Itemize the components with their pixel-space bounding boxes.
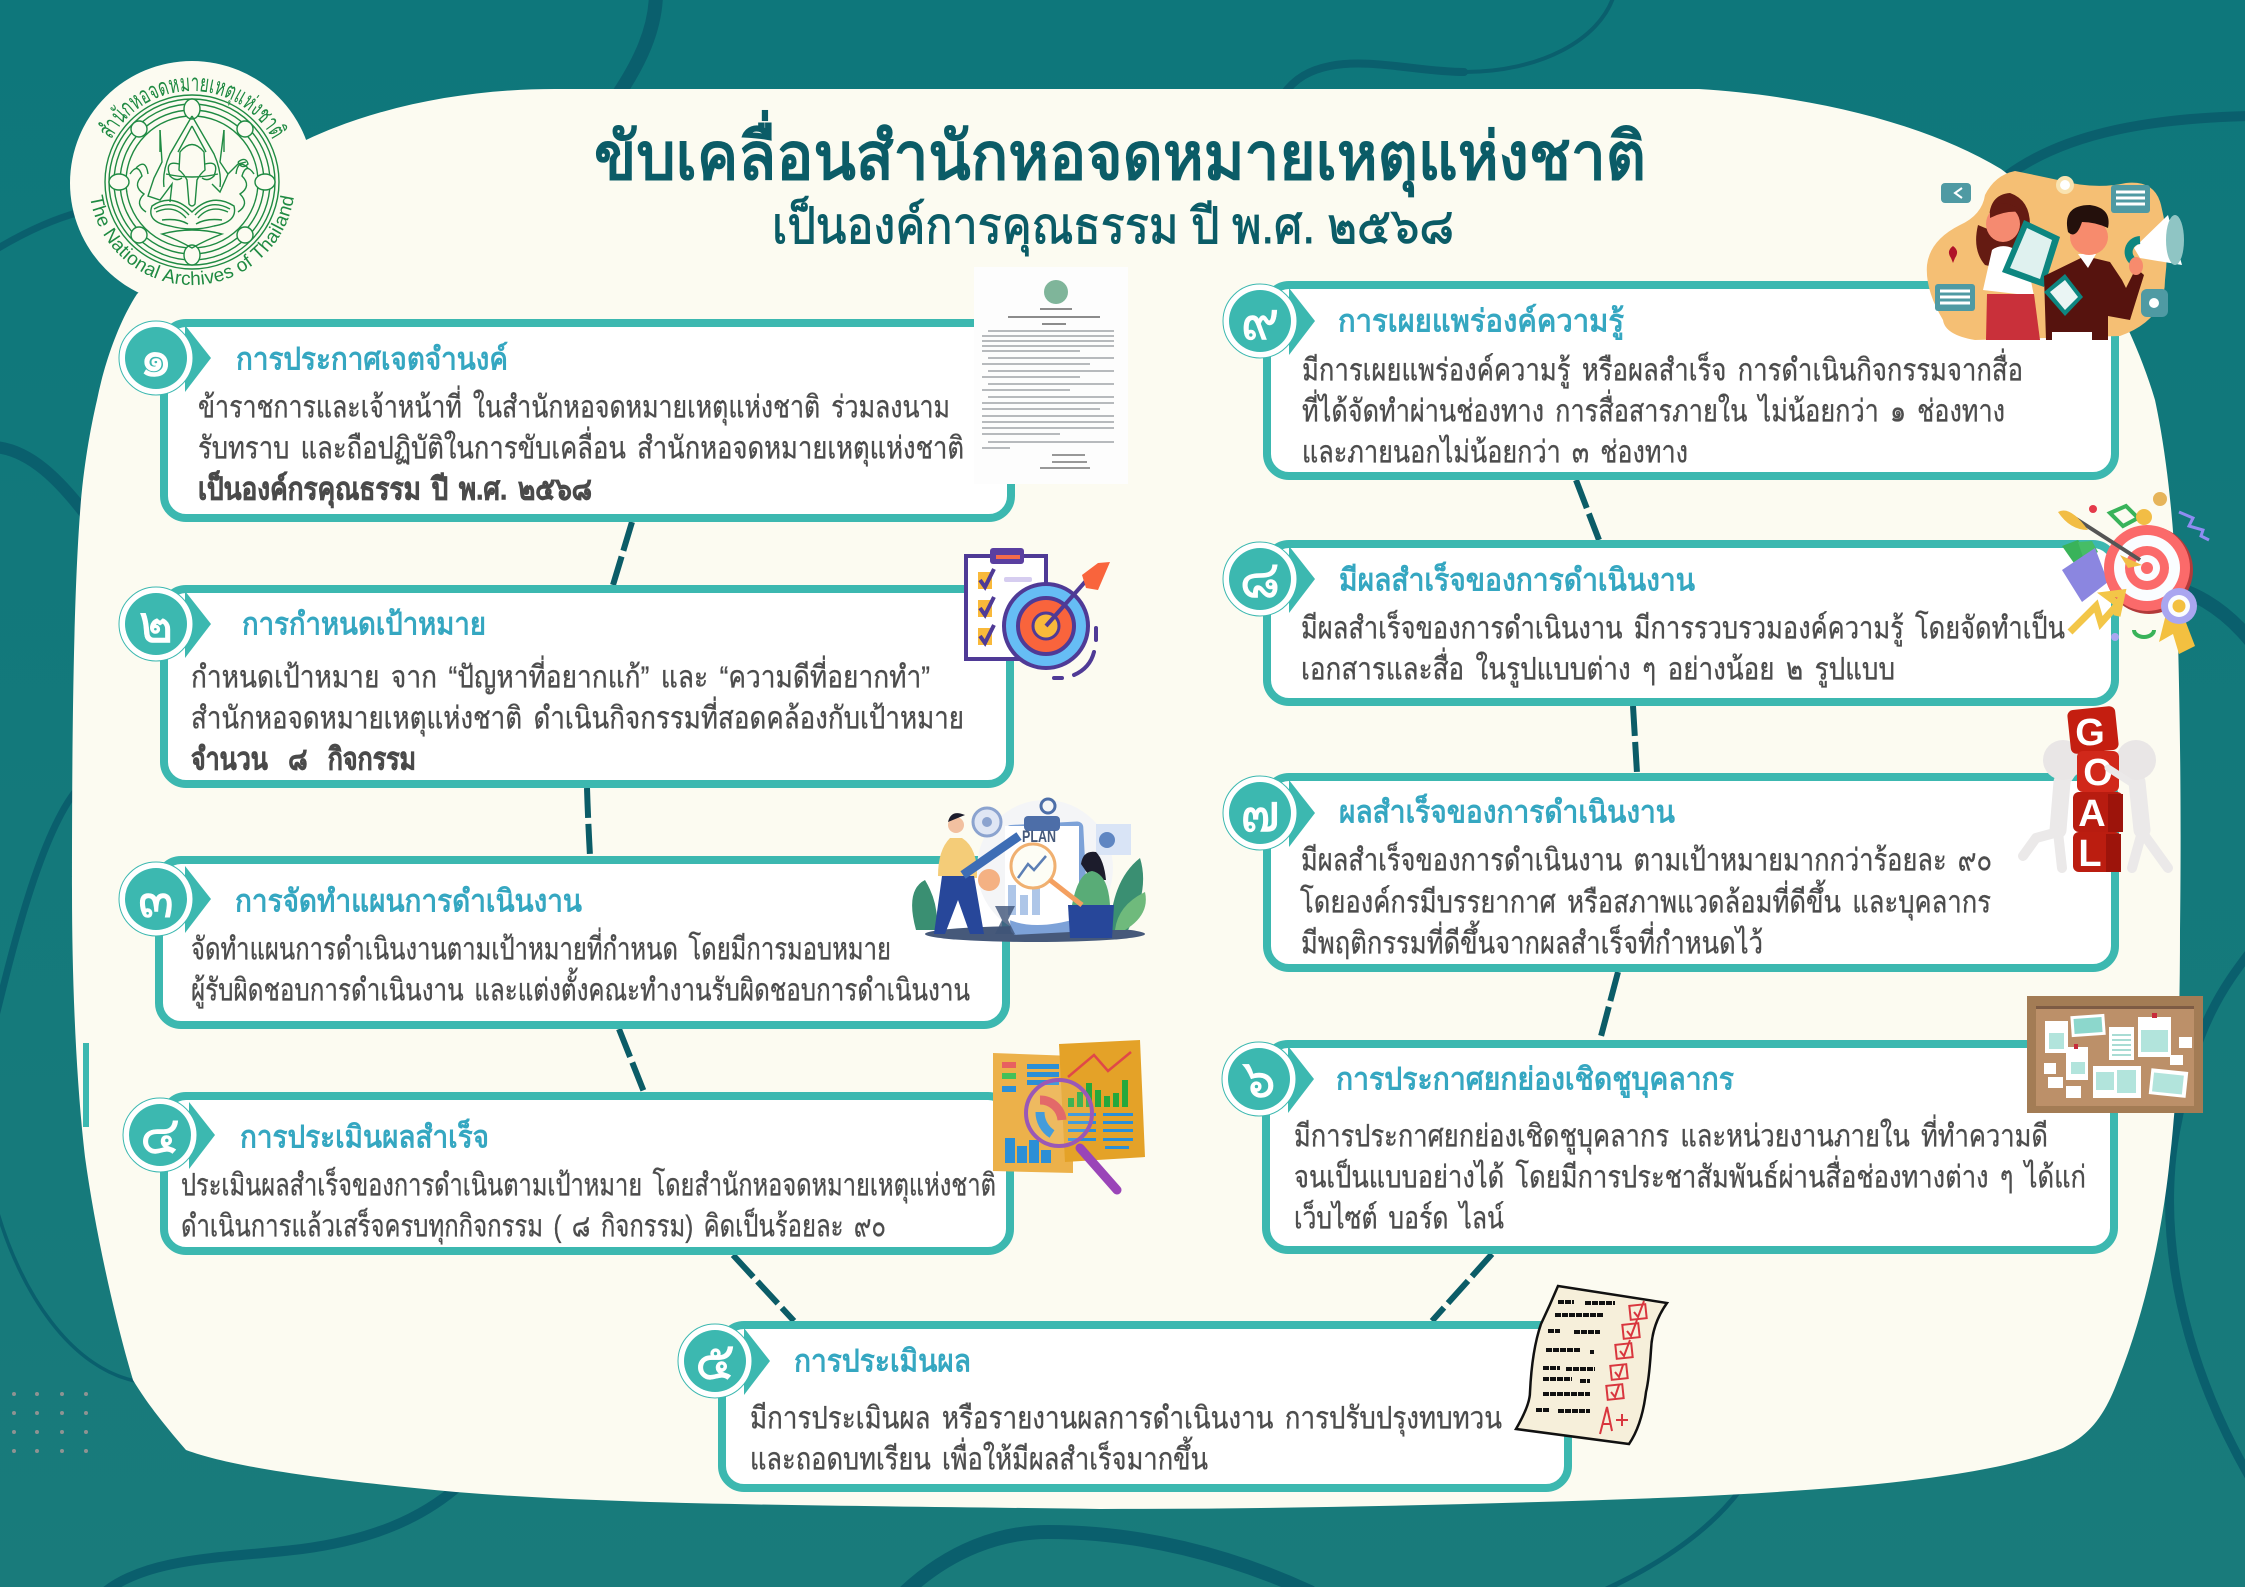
title: ขับเคลื่อนสำนักหอจดหมายเหตุแห่งชาติ: [594, 109, 1646, 198]
logo: National Archives of Thailand seal: [90, 78, 294, 286]
text 3: [191, 928, 970, 1008]
panel: step 5: [678, 1324, 1568, 1488]
heading 6: การประกาศยกย่องเชิดชูบุคลากร: [1336, 1062, 1734, 1098]
icon: plan illustration: PLAN: [1022, 827, 1056, 846]
dashed connector 1-2: [613, 522, 632, 585]
text 6: เว็บไซต์ บอร์ด ไลน์: [1294, 1200, 1504, 1236]
text 8: เอกสารและสื่อ ในรูปแบบต่าง ๆ อย่างน้อย ๒ รูปแบบ: [1301, 648, 1895, 688]
badge 6: ๖: [1242, 1050, 1276, 1109]
badge 7: [1223, 776, 1315, 850]
text 4: ประเมินผลสำเร็จของการดำเนินตามเป้าหมาย โดยสำนักหอจดหมายเหตุแห่งชาติ: [181, 1166, 996, 1204]
icon: people with megaphone: [1927, 171, 2184, 340]
icon: GOAL blocks with figures: G: [2075, 712, 2105, 754]
badge 9: ๙: [1241, 292, 1279, 351]
text 7: โดยองค์กรมีบรรยากาศ หรือสภาพแวดล้อมที่ดีขึ้น และบุคลากร: [1300, 880, 1991, 922]
panel: step 2: [119, 587, 1010, 784]
decorative dots: [12, 1392, 88, 1453]
subtitle: เป็นองค์การคุณธรรม ปี พ.ศ. ๒๕๖๘: [772, 196, 1454, 256]
text 6: มีการประกาศยกย่องเชิดชูบุคลากร และหน่วยงานภายใน ที่ทำความดี: [1294, 1114, 2048, 1156]
text 1: [198, 386, 964, 508]
accent bar: [83, 1043, 89, 1127]
badge 7: ๗: [1240, 784, 1280, 843]
heading 3: การจัดทำแผนการดำเนินงาน: [235, 884, 582, 918]
icon: plan illustration: [912, 799, 1146, 942]
text 7: มีผลสำเร็จของการดำเนินงาน ตามเป้าหมายมากกว่าร้อยละ ๙๐: [1301, 842, 1992, 878]
text 3: จัดทำแผนการดำเนินงานตามเป้าหมายที่กำหนด โดยมีการมอบหมาย: [191, 928, 891, 966]
heading 9: การเผยแพร่องค์ความรู้: [1338, 304, 1624, 340]
badge 6: [1222, 1042, 1314, 1116]
icon: GOAL blocks with figures: [2023, 706, 2168, 875]
icon: report charts with magnifier: [993, 1040, 1145, 1190]
text 4: [181, 1166, 996, 1246]
text 6: จนเป็นแบบอย่างได้ โดยมีการประชาสัมพันธ์ผ่านสื่อช่องทางต่าง ๆ ได้แก่: [1294, 1156, 2086, 1194]
dashed connector 8-7: [1633, 706, 1637, 773]
badge 5: [678, 1324, 770, 1398]
dashed connector 2-3: [587, 788, 590, 856]
heading 7: ผลสำเร็จของการดำเนินงาน: [1339, 792, 1675, 830]
badge 1: ๑: [139, 329, 173, 388]
text 9: มีการเผยแพร่องค์ความรู้ หรือผลสำเร็จ การดำเนินกิจกรรมจากสื่อ: [1302, 348, 2023, 388]
text 9: [1302, 348, 2023, 470]
text 4: ดำเนินการแล้วเสร็จครบทุกกิจกรรม ( ๘ กิจกรรม) คิดเป็นร้อยละ ๙๐: [181, 1208, 886, 1246]
logo: National Archives of Thailand seal: The National Archives of Thailand: [90, 194, 294, 286]
panel: step 9: [1223, 284, 2115, 476]
text 5: และถอดบทเรียน เพื่อให้มีผลสำเร็จมากขึ้น: [750, 1436, 1208, 1476]
text 9: และภายนอกไม่น้อยกว่า ๓ ช่องทาง: [1302, 434, 1688, 470]
icon: GOAL blocks with figures: A: [2078, 793, 2106, 835]
text 2: สำนักหอจดหมายเหตุแห่งชาติ ดำเนินกิจกรรมที่สอดคล้องกับเป้าหมาย: [191, 696, 964, 738]
badge 8: ๘: [1240, 550, 1280, 609]
text 8: [1301, 610, 2065, 688]
text 1: รับทราบ และถือปฏิบัติในการขับเคลื่อน สำนักหอจดหมายเหตุแห่งชาติ: [198, 426, 964, 468]
dashed connector 9-8: [1576, 480, 1599, 540]
badge 9: [1223, 284, 1315, 358]
heading 2: การกำหนดเป้าหมาย: [242, 606, 486, 642]
text 9: ที่ได้จัดทำผ่านช่องทาง การสื่อสารภายใน ไม่น้อยกว่า ๑ ช่องทาง: [1302, 390, 2005, 428]
heading 8: มีผลสำเร็จของการดำเนินงาน: [1339, 560, 1695, 598]
badge 2: ๒: [139, 595, 173, 654]
text 6: [1294, 1114, 2086, 1236]
text 1: เป็นองค์กรคุณธรรม ปี พ.ศ. ๒๕๖๘: [198, 470, 592, 508]
dashed connector 6-5: [1432, 1254, 1492, 1321]
badge 5: ๕: [695, 1332, 735, 1391]
text 3: ผู้รับผิดชอบการดำเนินงาน และแต่งตั้งคณะทำงานรับผิดชอบการดำเนินงาน: [191, 968, 970, 1008]
badge 2: [119, 587, 211, 661]
text 7: [1300, 842, 1992, 960]
text 1: ข้าราชการและเจ้าหน้าที่ ในสำนักหอจดหมายเหตุแห่งชาติ ร่วมลงนาม: [198, 386, 950, 426]
icon: GOAL blocks with figures: L: [2078, 833, 2102, 875]
icon: signed declaration document: [974, 267, 1128, 484]
text 5: [750, 1400, 1502, 1476]
panel: step 8: [1223, 542, 2115, 702]
heading 5: การประเมินผล: [794, 1344, 971, 1378]
badge 8: [1223, 542, 1315, 616]
logo: National Archives of Thailand seal: สำนักหอจดหมายเหตุแห่งชาติ: [98, 78, 288, 139]
panel: step 7: [1223, 776, 2115, 968]
dashed connector 7-6: [1600, 972, 1618, 1040]
icon: graded paper A+: [1516, 1286, 1667, 1444]
panel: step 1: [119, 321, 1011, 518]
dashed connector 3-4: [619, 1029, 644, 1092]
heading 1: การประกาศเจตจำนงค์: [236, 342, 508, 376]
text 7: มีพฤติกรรมที่ดีขึ้นจากผลสำเร็จที่กำหนดไว้: [1301, 920, 1763, 960]
icon: target with arrow and wallet: [2058, 492, 2209, 654]
icon: notice board: [2027, 996, 2203, 1113]
text 5: มีการประเมินผล หรือรายงานผลการดำเนินงาน การปรับปรุงทบทวน: [750, 1400, 1502, 1438]
badge 3: ๓: [138, 870, 174, 929]
text 2: [191, 656, 964, 776]
panel: step 3: [119, 860, 1006, 1025]
badge 4: [123, 1098, 215, 1172]
icon: GOAL blocks with figures: O: [2083, 752, 2113, 794]
icon: checklist and target: [966, 548, 1110, 678]
badge 3: [119, 862, 211, 936]
panel: step 4: [123, 1096, 1010, 1251]
badge 1: [119, 321, 211, 395]
badge 4: ๔: [140, 1106, 180, 1165]
text 2: กำหนดเป้าหมาย จาก “ปัญหาที่อยากแก้” และ “ความดีที่อยากทำ”: [191, 656, 930, 694]
dashed connector 4-5: [733, 1255, 794, 1321]
text 2: จำนวน ๘ กิจกรรม: [191, 742, 416, 776]
panel: step 6: [1222, 1042, 2114, 1250]
text 8: มีผลสำเร็จของการดำเนินงาน มีการรวบรวมองค์ความรู้ โดยจัดทำเป็น: [1301, 610, 2065, 646]
heading 4: การประเมินผลสำเร็จ: [240, 1118, 489, 1154]
